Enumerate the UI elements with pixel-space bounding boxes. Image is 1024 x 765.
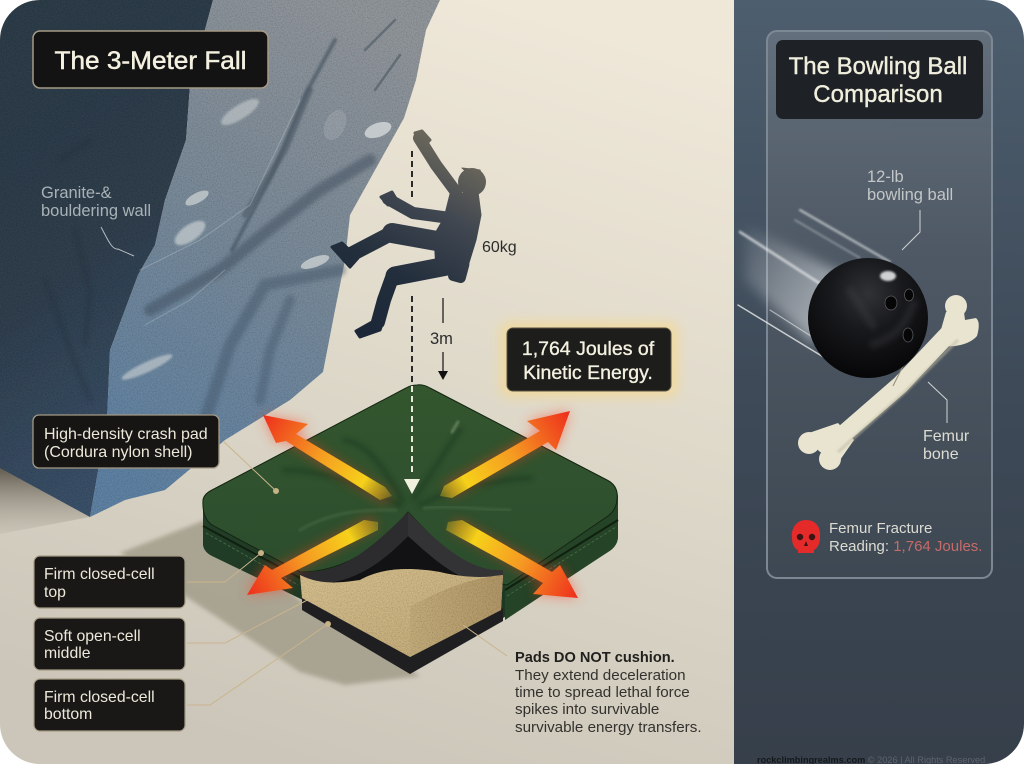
illustration: femur bone [798,295,979,470]
arrow: up-right [440,411,570,498]
label box: firm closed-cell top: Firm closed-cell [44,566,155,583]
label box: firm closed-cell top: top [44,584,66,601]
black closed-cell bottom layer [302,598,503,674]
label box: soft open-cell middle: middle [44,645,91,662]
title: the bowling ball comparison: Comparison [813,81,943,108]
arrows: radiating force [247,411,578,598]
callout glow and box: kinetic energy: Kinetic Energy. [523,362,653,384]
text: femur fracture reading: 1,764 Joules. [893,538,982,555]
text block: pads do not cushion: survivable energy transfers. [515,719,702,736]
label: Granite & bouldering wall [41,184,151,256]
label: 3m with arrows: 3m [430,330,453,348]
label box: firm closed-cell bottom: Firm closed-cell [44,689,155,706]
arrow: down-left [247,520,378,595]
rock cast shadow [0,466,90,534]
text: femur fracture reading: Reading: [829,538,893,555]
label: 3m with arrows [430,298,453,380]
text block: pads do not cushion: They extend deceleration [515,667,686,684]
illustration: climber silhouette [332,131,486,337]
icon: red skull [792,520,820,553]
text block: pads do not cushion: spikes into survivable [515,701,659,718]
panel: background of the 3-meter fall scene [0,0,734,764]
label box: soft open-cell middle: Soft open-cell [44,628,141,645]
title: the bowling ball comparison: The Bowling Ball [789,53,967,80]
label box: high-density crash pad: High-density crash pad [44,426,208,443]
label: 12-lb bowling ball: 12-lb [867,168,904,186]
rock holds with chalk [120,94,394,383]
label: 12-lb bowling ball: bowling ball [867,186,953,204]
title: the bowling ball comparison [776,40,983,119]
illustration: bowling ball [808,258,928,378]
label: 12-lb bowling ball [867,168,953,250]
label: femur bone [923,382,970,463]
pad cast shadow [120,520,420,685]
illustration: rock wall [0,0,440,517]
callout glow and box: kinetic energy [500,322,678,397]
label: 60kg: 60kg [482,239,517,256]
title: The 3-Meter Fall [33,31,268,88]
label box: firm closed-cell bottom: bottom [44,706,92,723]
arrow: down-right [446,520,578,598]
label box: firm closed-cell top [34,556,185,608]
black closed-cell top layer [330,536,459,582]
impact dashed line and arrowhead [404,386,420,494]
pad sides [203,494,618,657]
text block: pads do not cushion: time to spread lethal force [515,684,690,701]
label: femur bone: Femur [923,428,970,445]
fall path dashed line [411,151,413,386]
leader lines [187,441,507,705]
foam core [300,569,503,657]
illustration: crash pad [203,385,618,674]
text: femur fracture reading: Femur Fracture [829,520,932,537]
label box: high-density crash pad [33,415,219,468]
motion streaks [738,210,890,358]
fabric wrinkles [285,422,530,530]
label box: soft open-cell middle [34,618,185,670]
label box: high-density crash pad: (Cordura nylon shell) [44,444,193,461]
title: The 3-Meter Fall: The 3-Meter Fall [54,47,246,75]
pad top surface [203,385,617,585]
panel: glass comparison card [767,31,992,578]
rock cracks and shading [45,20,400,420]
pad seam [203,520,618,590]
label: Granite & bouldering wall: Granite-& [41,184,112,202]
callout glow and box: kinetic energy: 1,764 Joules of [522,338,655,360]
leader dots [258,488,331,627]
arrow: up-left [263,415,392,500]
label box: firm closed-cell bottom [34,679,185,731]
text block: pads do not cushion: Pads DO NOT cushion. [515,650,675,666]
label: femur bone: bone [923,446,959,463]
label: Granite & bouldering wall: bouldering wall [41,202,151,220]
panel: bowling ball comparison background [734,0,1024,764]
footer credit: rockclimbingrealms.com © 2026 | All Rights Reserved [757,755,985,765]
